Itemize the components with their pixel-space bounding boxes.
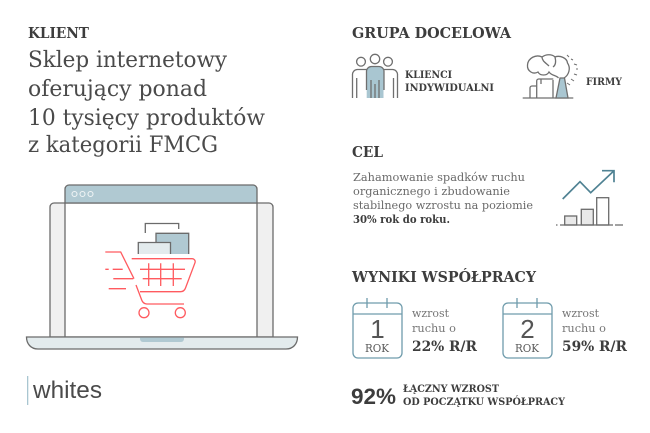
client description: z kategorii FMCG — [28, 132, 218, 158]
result: year 1: ruchu o — [412, 321, 456, 335]
icon: factory — [523, 55, 578, 98]
result: year 1: wzrost — [412, 306, 449, 320]
total growth figure: 92% — [351, 384, 396, 409]
icon: people — [352, 54, 398, 98]
client description: 10 tysięcy produktów — [28, 105, 265, 131]
calendar: year 1: ROK — [365, 342, 390, 355]
calendar: year 2: 2 — [520, 314, 535, 344]
icon: growth chart — [556, 171, 623, 225]
calendar: year 1: 1 — [370, 314, 385, 344]
label: firmy: FIRMY — [586, 76, 622, 88]
total growth label: ŁĄCZNY WZROST — [403, 383, 499, 395]
total growth label: OD POCZĄTKU WSPÓŁPRACY — [403, 394, 565, 408]
result: year 1 — [412, 306, 477, 355]
label: klienci indywidualni: KLIENCI — [405, 69, 452, 81]
heading: grupa docelowa: GRUPA DOCELOWA — [352, 24, 511, 42]
goal text: 30% rok do roku. — [353, 212, 450, 226]
client description: oferujący ponad — [28, 76, 207, 102]
result: year 1: 22% R/R — [412, 339, 477, 355]
goal text: Zahamowanie spadków ruchu — [353, 170, 525, 184]
heading: cel: CEL — [352, 143, 383, 161]
label: klienci indywidualni: INDYWIDUALNI — [405, 82, 494, 94]
logo: whites: whites — [32, 377, 102, 404]
calendar: year 2 — [503, 298, 552, 358]
heading: klient: KLIENT — [28, 24, 90, 42]
total growth label — [403, 383, 565, 408]
goal text — [353, 170, 533, 226]
client description — [28, 47, 265, 158]
laptop illustration — [26, 185, 298, 349]
heading: wyniki współpracy: WYNIKI WSPÓŁPRACY — [351, 268, 536, 286]
result: year 2: 59% R/R — [562, 339, 627, 355]
result: year 2 — [562, 306, 627, 355]
goal text: organicznego i zbudowanie — [353, 184, 510, 198]
goal text: stabilnego wzrostu na poziomie — [353, 198, 533, 212]
calendar: year 1 — [353, 298, 402, 358]
client description: Sklep internetowy — [28, 47, 227, 73]
calendar: year 2: ROK — [515, 342, 540, 355]
label: klienci indywidualni — [405, 69, 494, 94]
result: year 2: ruchu o — [562, 321, 606, 335]
icon: shopping cart — [105, 224, 195, 318]
result: year 2: wzrost — [562, 306, 599, 320]
